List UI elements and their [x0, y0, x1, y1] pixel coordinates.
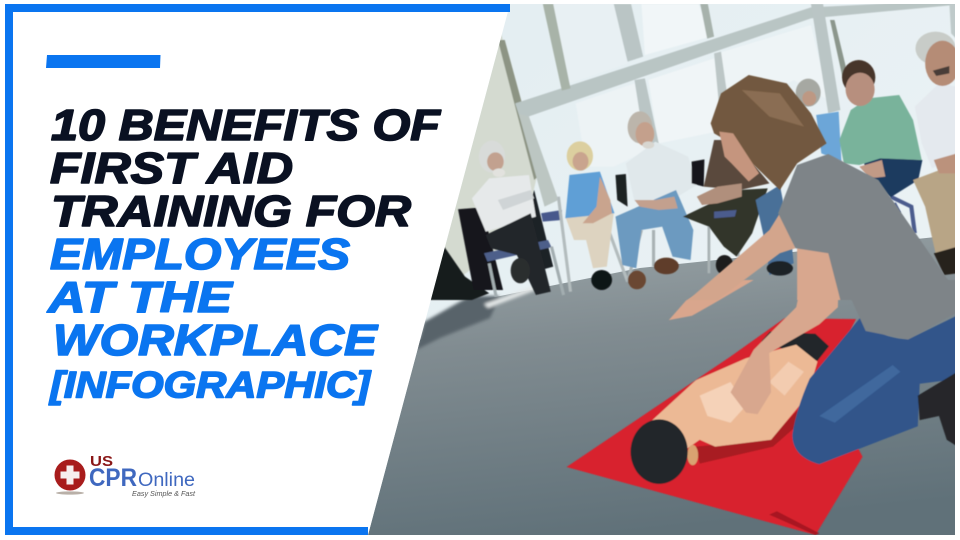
- title: FIRST AID: [50, 144, 293, 193]
- outstretched hand: [669, 280, 754, 320]
- manikin: [761, 332, 829, 361]
- shirt hem: [843, 280, 960, 340]
- logo: US CPR Online: Online: [138, 470, 195, 491]
- man with striped shirt: [692, 159, 704, 187]
- title: [47, 101, 441, 405]
- title: [INFOGRAPHIC]: [49, 364, 372, 406]
- logo: US CPR Online: [54, 453, 196, 498]
- jeans: [792, 314, 960, 464]
- far-left person: [427, 247, 489, 300]
- title: 10 BENEFITS OF: [51, 101, 441, 150]
- logo: US CPR Online: CPR: [89, 464, 137, 492]
- logo: US CPR Online: US: [90, 453, 113, 470]
- man with jeans: [615, 174, 628, 207]
- accent bar: [46, 55, 160, 68]
- photo: first aid training class with CPR manikin: [360, 0, 960, 540]
- title: WORKPLACE: [53, 316, 379, 365]
- title: EMPLOYEES: [50, 230, 350, 279]
- trainee upper body: [688, 75, 957, 300]
- red blanket: [567, 318, 863, 535]
- carpet floor: [368, 235, 955, 535]
- title: TRAINING FOR: [51, 187, 411, 236]
- boots: [917, 372, 955, 446]
- man on right: [913, 163, 957, 253]
- face: [719, 132, 759, 182]
- icon: red medical cross: [54, 460, 86, 495]
- floor shadow and skirting highlight: [416, 286, 536, 350]
- frame: blue left border: [5, 4, 13, 535]
- window frames and wall: [427, 0, 957, 300]
- supporting arm: [797, 248, 840, 300]
- logo: US CPR Online: Easy Simple & Fast: [132, 491, 196, 498]
- outstretched arm: [688, 213, 795, 300]
- man 1: [458, 207, 503, 290]
- hand and arm on manikin: [730, 300, 839, 414]
- older woman behind: [796, 79, 821, 107]
- woman in teal: [891, 197, 915, 233]
- title: AT THE: [47, 273, 234, 322]
- CPR scene: blanket, manikin and trainee lower body: [567, 280, 960, 535]
- grey t-shirt: [778, 154, 957, 300]
- frame: blue bottom border: [5, 527, 368, 535]
- hair: [711, 75, 827, 190]
- seated audience: [427, 32, 960, 300]
- frame: blue top border: [5, 4, 510, 12]
- woman in blue: [541, 210, 562, 222]
